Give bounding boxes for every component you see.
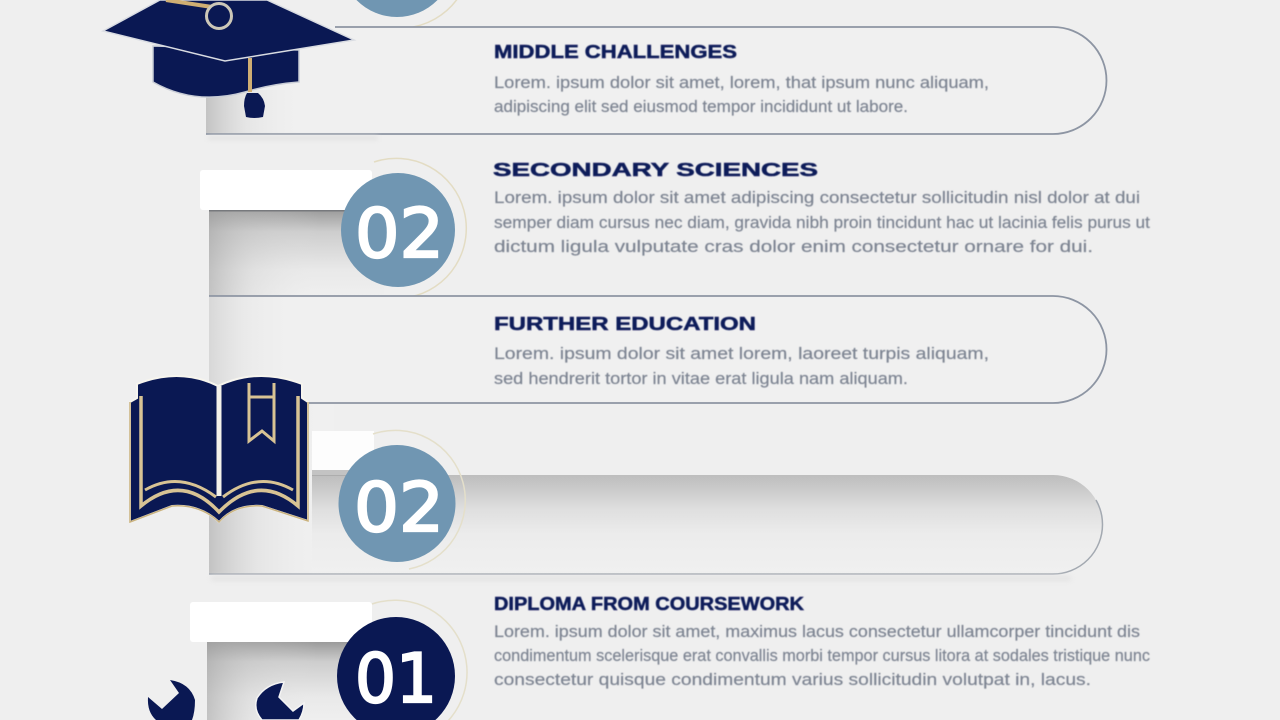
text block: further education: FURTHER EDUCATION (494, 314, 756, 334)
text block: final stage: condimentum scelerisque erat convallis morbi tempor cursus litora at sodales tristique nunc (494, 646, 1150, 665)
timeline stage 1: top badge fragment (340, 0, 458, 28)
text block: final stage (494, 594, 1150, 689)
text block: secondary stage: semper diam cursus nec diam, gravida nibh proin tincidunt hac ut lacinia felis purus ut (494, 213, 1150, 232)
text block: final stage: consectetur quisque condimentum varius sollicitudin volutpat in, lacus. (494, 670, 1091, 689)
text block: further education: sed hendrerit tortor in vitae erat ligula nam aliquam. (494, 369, 908, 388)
icon: open book (130, 376, 308, 522)
text block: secondary stage: SECONDARY SCIENCES (493, 160, 818, 180)
text block: first stage: MIDDLE CHALLENGES (494, 42, 737, 62)
text block: secondary stage: Lorem. ipsum dolor sit amet adipiscing consectetur sollicitudin nisl dolor at dui (494, 188, 1140, 207)
text block: first stage: adipiscing elit sed eiusmod tempor incididunt ut labore. (494, 97, 908, 116)
text block: first stage: Lorem. ipsum dolor sit amet, lorem, that ipsum nunc aliquam, (494, 73, 989, 92)
badge: 01: 01 (355, 640, 437, 719)
text block: final stage: DIPLOMA FROM COURSEWORK (494, 594, 804, 614)
panel: stage 02 connector and tab (200, 170, 384, 296)
text block: final stage: Lorem. ipsum dolor sit amet, maximus lacus consectetur ullamcorper tincidunt dis (494, 622, 1140, 641)
text block: secondary stage (493, 160, 1150, 256)
badge: 02 (341, 158, 466, 297)
text block: further education (494, 314, 989, 388)
panel: first pill (206, 27, 1106, 140)
badge: second 02 (338, 430, 465, 569)
badge: second 02: 02 (354, 469, 444, 548)
icon: crossed wrenches (148, 680, 304, 720)
badge: 01 (337, 600, 467, 720)
text block: first stage (494, 42, 989, 116)
icon: graduation cap (103, 0, 354, 118)
text block: secondary stage: dictum ligula vulputate cras dolor enim consectetur ornare for dui. (494, 237, 1093, 256)
text block: further education: Lorem. ipsum dolor sit amet lorem, laoreet turpis aliquam, (494, 344, 989, 363)
panel: third stage bar (209, 404, 1102, 581)
panel: second pill (209, 296, 1106, 403)
badge: 02: 02 (355, 195, 444, 274)
panel: stage 01 connector and tab (190, 602, 377, 720)
